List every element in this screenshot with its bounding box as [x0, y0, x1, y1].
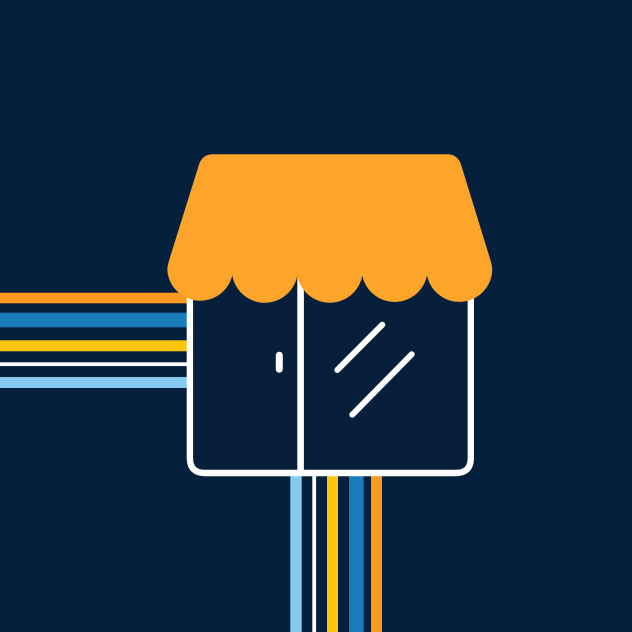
shop building — [190, 276, 471, 473]
door handle — [276, 352, 283, 373]
vertical stripes leaving from bottom — [290, 474, 382, 632]
building outline — [190, 285, 471, 473]
horizontal stripes entering from left — [0, 293, 190, 388]
door divider — [297, 276, 304, 472]
window glare lines — [337, 325, 412, 415]
awning — [167, 154, 492, 303]
